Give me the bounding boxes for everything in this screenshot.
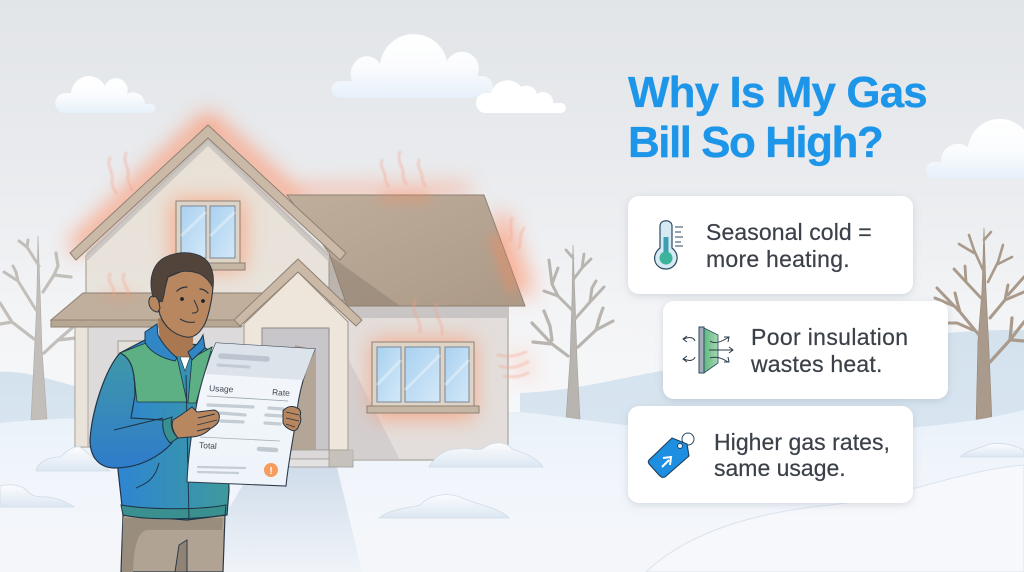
person: hair bbox=[151, 253, 213, 302]
house: wall shadow bbox=[347, 306, 508, 318]
person: face bbox=[158, 268, 213, 337]
person: jacket hem bbox=[121, 505, 226, 519]
heat glow around windows bbox=[172, 200, 474, 418]
bill: rows bbox=[208, 405, 283, 424]
icon: price tag bbox=[648, 433, 694, 477]
snow hill bottom right bbox=[646, 465, 1024, 572]
panel: seasonal cold bbox=[628, 196, 913, 294]
bill: total label: Total bbox=[199, 440, 217, 451]
tree: centre bbox=[532, 245, 613, 419]
foreground snow bbox=[0, 410, 1024, 572]
cloud: small centre right bbox=[476, 80, 566, 113]
house: gable inner shadow bbox=[86, 137, 329, 262]
house: awning lip bbox=[51, 320, 241, 327]
house: gable roof trim bbox=[70, 125, 346, 260]
drift: by house centre bbox=[429, 443, 543, 467]
tree: left bbox=[0, 236, 76, 420]
heat glow on roof and awning bbox=[105, 197, 514, 295]
cloud: top centre bbox=[332, 34, 493, 98]
person: trousers bbox=[121, 515, 225, 572]
person: sleeve fold bbox=[114, 418, 163, 430]
person: collar left bbox=[145, 324, 177, 361]
text: seasonal cold: Seasonal cold = bbox=[706, 219, 872, 245]
icon: thermometer bbox=[655, 221, 683, 269]
bill document bbox=[187, 343, 315, 486]
person holding bill bbox=[90, 253, 315, 572]
text: poor insulation: wastes heat. bbox=[750, 351, 883, 377]
bill: footer lines bbox=[198, 467, 245, 473]
house: left column bbox=[75, 326, 88, 447]
person: back hand bbox=[283, 406, 301, 431]
person: ear bbox=[149, 296, 160, 312]
text: poor insulation: Poor insulation bbox=[751, 324, 908, 350]
drift: lower left bbox=[0, 485, 74, 507]
background hill right bbox=[520, 330, 1024, 450]
text: higher rates: same usage. bbox=[714, 455, 846, 481]
house: right wing wall bbox=[329, 300, 508, 460]
person: jacket chest panel right bbox=[188, 347, 212, 403]
person: collar right bbox=[188, 335, 205, 360]
person: cuff bbox=[163, 417, 178, 443]
person: jacket body bbox=[118, 340, 229, 520]
house: awning bbox=[51, 293, 262, 320]
snow drifts bbox=[0, 443, 1024, 518]
background hill left bbox=[0, 372, 110, 440]
house: porch gable trim bbox=[234, 259, 362, 326]
upper window bbox=[176, 201, 245, 270]
person: front hand bbox=[172, 407, 219, 438]
panel: higher rates bbox=[628, 406, 913, 503]
drift: left near house bbox=[36, 447, 110, 471]
cloud: far right bbox=[926, 119, 1024, 179]
panel: poor insulation bbox=[663, 301, 948, 399]
person: sleeve bbox=[90, 353, 172, 468]
bill: total value bbox=[259, 449, 276, 450]
house: door inner shade bbox=[290, 345, 316, 450]
cloud: upper left bbox=[55, 76, 156, 113]
bill: alert icon: ! bbox=[269, 466, 273, 477]
lower window bbox=[367, 342, 479, 413]
bill: rate label: Rate bbox=[272, 387, 290, 398]
person: jacket zip line bbox=[186, 375, 189, 520]
house bbox=[51, 125, 525, 467]
house: small hidden window bbox=[118, 341, 158, 381]
heat waves bbox=[109, 152, 528, 377]
text: higher rates: Higher gas rates, bbox=[714, 429, 890, 455]
text: seasonal cold: more heating. bbox=[706, 246, 850, 272]
bill: alert icon bbox=[264, 463, 278, 477]
house: roof shadow bbox=[329, 255, 400, 306]
title: Why Is My Gas bbox=[628, 68, 927, 117]
drift: bottom centre bbox=[379, 495, 509, 518]
drift: right bbox=[960, 443, 1024, 457]
person: pocket bbox=[136, 463, 159, 488]
house: main roof right bbox=[287, 195, 525, 306]
house: door bbox=[262, 328, 329, 450]
bill: header lines bbox=[221, 356, 267, 359]
icon: insulation wall bbox=[683, 327, 733, 373]
person: t-shirt bbox=[180, 357, 190, 371]
house: wall shadow diagonal bbox=[349, 360, 400, 460]
person: neck bbox=[158, 318, 194, 358]
heat glow behind house bbox=[74, 122, 530, 378]
person: head bbox=[149, 253, 213, 337]
bill: usage label: Usage bbox=[209, 383, 234, 394]
bill: divider bbox=[200, 437, 280, 441]
house: steps bbox=[287, 450, 353, 467]
tree: far right bbox=[935, 228, 1024, 425]
snow path to door bbox=[190, 467, 362, 572]
person: finger lines bbox=[197, 414, 217, 431]
title: Bill So High? bbox=[628, 118, 882, 167]
house: porch wall bbox=[244, 272, 348, 452]
house: gable wall bbox=[86, 140, 329, 300]
person: jacket chest panel bbox=[120, 343, 187, 402]
bill: header band bbox=[206, 343, 315, 380]
house: lower left wall bbox=[75, 326, 250, 447]
